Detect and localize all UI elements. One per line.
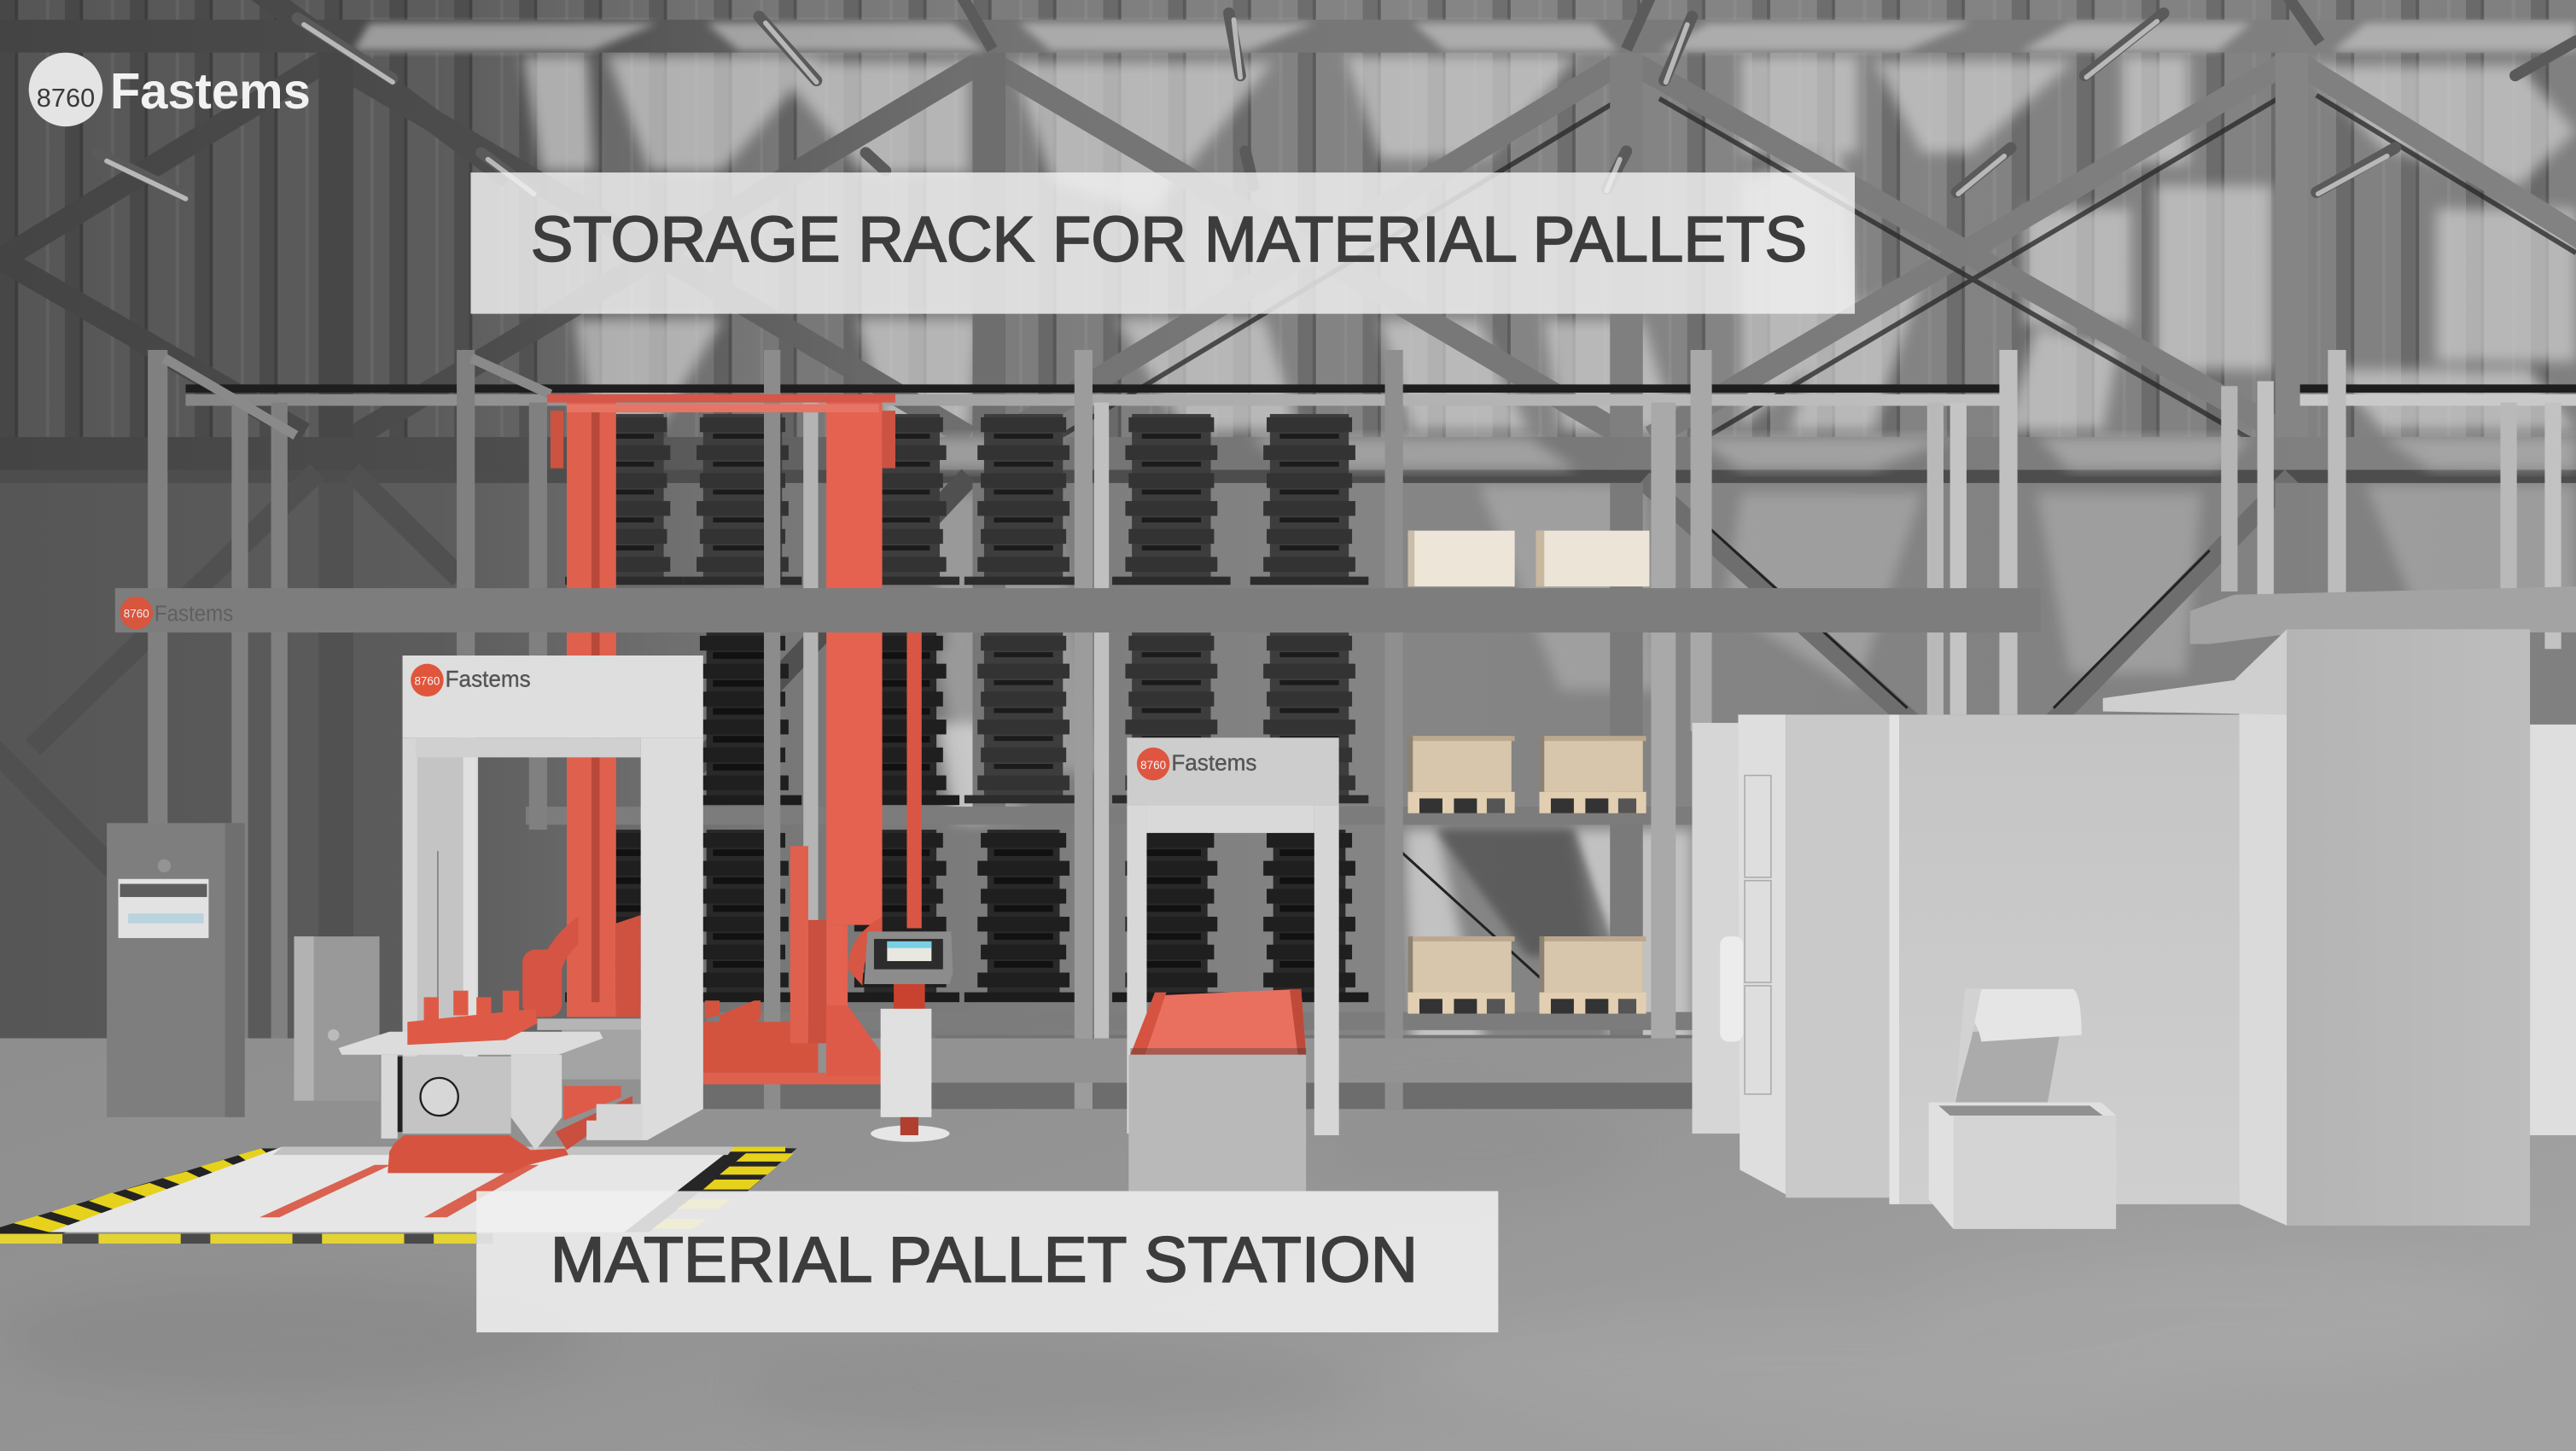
gantry inner lintel xyxy=(416,737,641,757)
gantry right leg xyxy=(641,737,703,1140)
pallet stacks xyxy=(565,414,1368,1002)
red stacker crane xyxy=(522,394,922,1084)
chute xyxy=(1955,989,2082,1105)
station logo: 8760 xyxy=(414,675,440,688)
uprights xyxy=(148,350,2561,1109)
red conveyor xyxy=(1130,989,1306,1055)
title: pallet station xyxy=(476,1191,1498,1332)
side leg left xyxy=(1127,805,1146,1133)
red base xyxy=(388,1135,568,1173)
truss diagonals upper xyxy=(0,0,2576,437)
station header xyxy=(1127,737,1339,805)
control cabinet xyxy=(107,823,245,1117)
panel stand xyxy=(871,984,950,1142)
logo top left xyxy=(29,53,311,126)
gantry header xyxy=(403,656,703,737)
band logo: 8760 xyxy=(124,608,149,621)
steel truss structure xyxy=(0,0,2576,1068)
floor pad with hazard stripes xyxy=(0,1147,797,1244)
side handle xyxy=(1720,936,1743,1041)
logo top left: Fastems xyxy=(110,62,311,119)
bin xyxy=(1929,1103,2116,1229)
red forks xyxy=(556,1086,632,1150)
red fixture xyxy=(407,991,537,1045)
logo top left: 8760 xyxy=(37,83,95,113)
gantry left leg xyxy=(403,737,478,1068)
middle row cartons xyxy=(1408,736,1646,813)
main horizontal rack band xyxy=(115,588,2041,632)
inner lintel xyxy=(1146,805,1314,833)
large machine tool xyxy=(1692,629,2576,1226)
hazard border xyxy=(0,1147,797,1244)
rack shelves xyxy=(238,807,1692,1109)
side leg right xyxy=(1314,805,1339,1135)
station logo: Fastems xyxy=(446,667,531,692)
right side ledge xyxy=(2190,586,2576,644)
lower row cartons xyxy=(1408,936,1646,1014)
grey base xyxy=(1128,1055,1306,1191)
band logo xyxy=(120,597,233,629)
red rails xyxy=(259,1165,539,1217)
title: storage rack: STORAGE RACK FOR MATERIAL PALLETS xyxy=(531,203,1807,275)
cartons on shelves xyxy=(1408,531,1649,1014)
station logo xyxy=(411,664,531,696)
white gantry left station xyxy=(338,656,703,1173)
title: pallet station: MATERIAL PALLET STATION xyxy=(551,1223,1418,1295)
header logo: 8760 xyxy=(1140,759,1166,772)
header logo xyxy=(1137,748,1256,780)
door with panels xyxy=(1738,714,1786,1194)
white pad xyxy=(50,1147,734,1232)
rack base on floor xyxy=(703,1082,1692,1109)
header logo: Fastems xyxy=(1171,750,1256,776)
roof braces xyxy=(961,0,2320,50)
machine pedestal xyxy=(382,1055,562,1150)
lintel shelf xyxy=(537,1018,641,1080)
hanging lights xyxy=(97,13,2576,199)
title: storage rack xyxy=(470,172,1855,314)
scrap bin with chute xyxy=(1929,989,2116,1229)
lower truss diagonals xyxy=(0,471,970,871)
operator panel xyxy=(864,931,953,1142)
middle pallet station xyxy=(1127,737,1339,1191)
storage rack uprights and rails xyxy=(148,350,2576,1109)
step block xyxy=(586,1104,643,1140)
cabinet label xyxy=(119,879,208,938)
top row cartons xyxy=(1408,531,1649,586)
top beam xyxy=(0,20,2576,53)
band logo: Fastems xyxy=(154,601,233,626)
wide horizontal band xyxy=(0,437,2576,469)
warehouse wall background xyxy=(0,0,2576,1068)
columns xyxy=(318,53,2308,447)
monitor xyxy=(864,931,953,984)
grey box xyxy=(294,936,380,1101)
white table top xyxy=(338,1032,603,1055)
floor xyxy=(0,1038,2576,1451)
upper frame rail xyxy=(185,384,2576,405)
